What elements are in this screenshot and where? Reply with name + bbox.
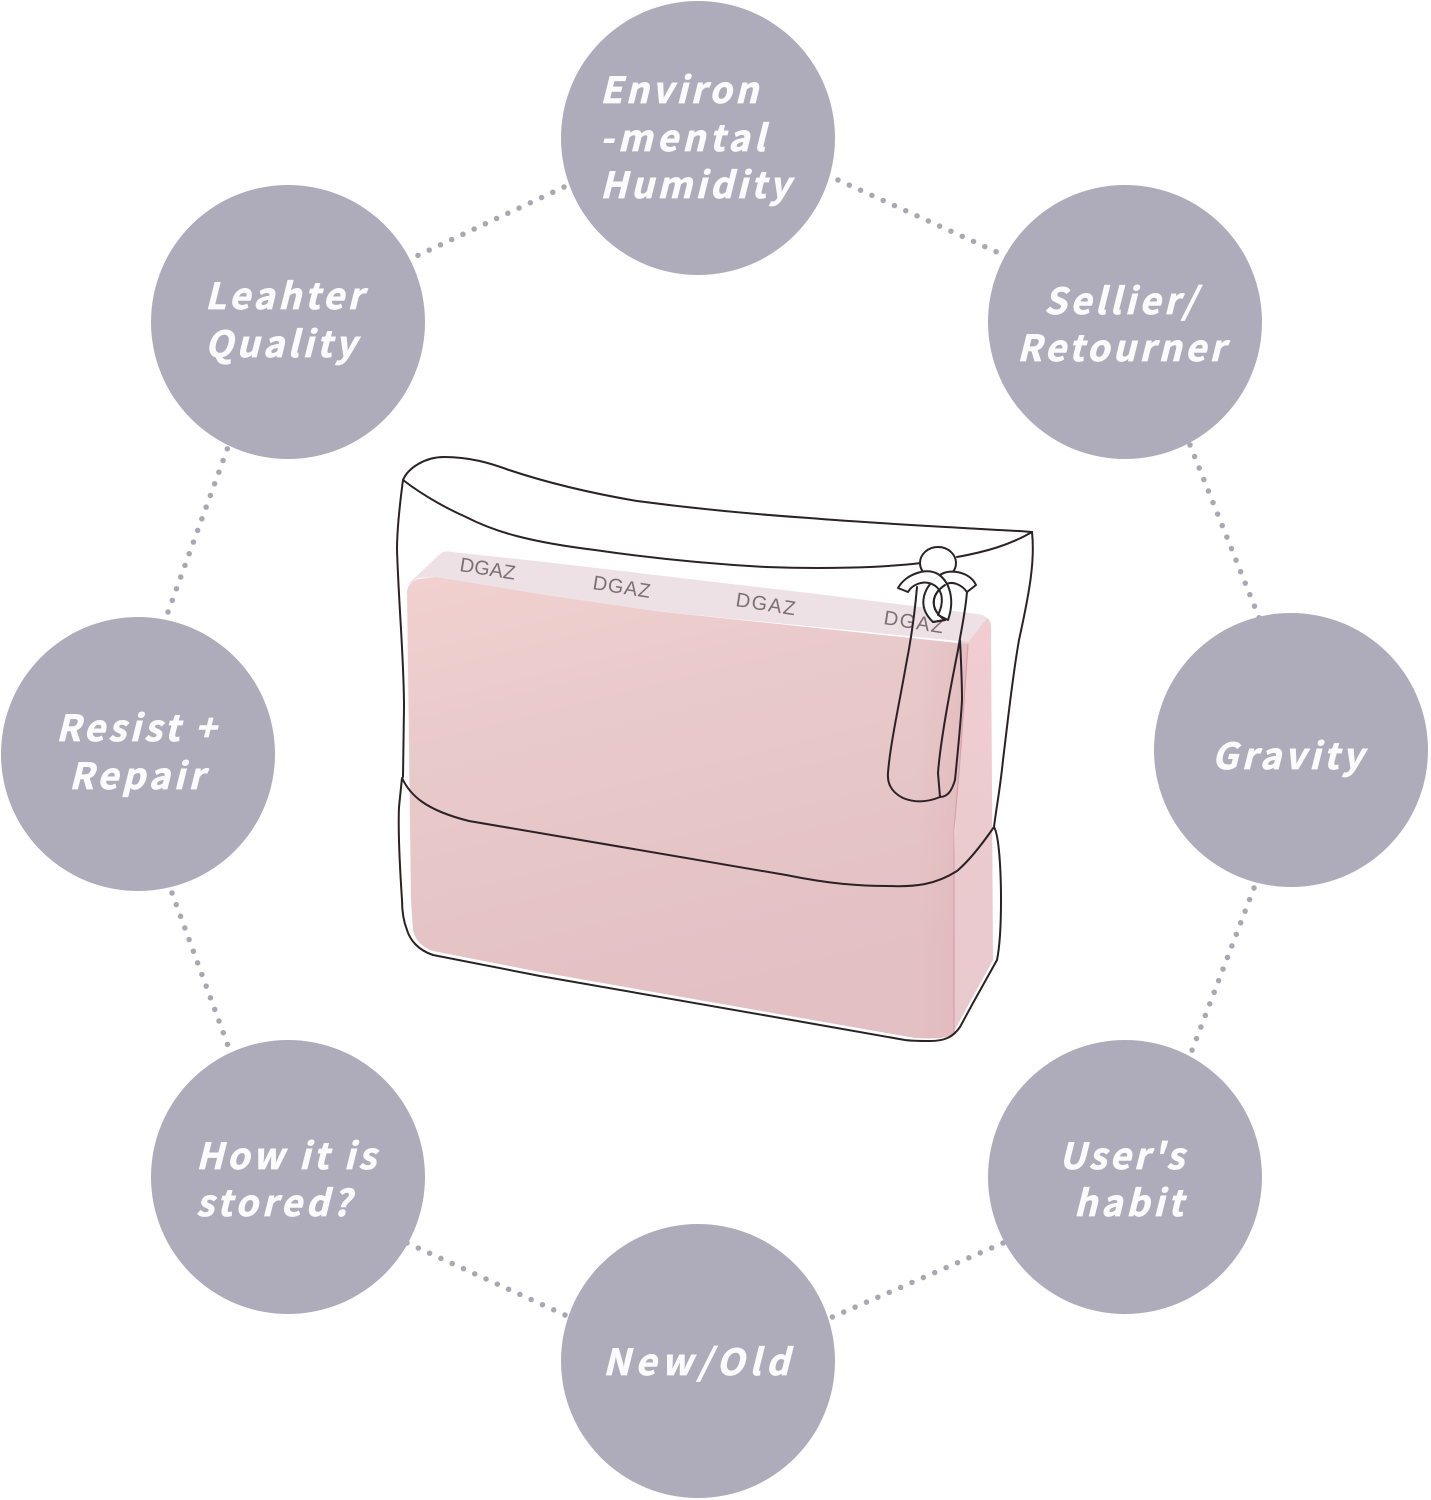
DGAZ labels: DGAZ (458, 554, 517, 585)
DGAZ labels: DGAZ (882, 607, 945, 638)
circle: Leather Quality: Quality (205, 316, 361, 368)
circle: How it is stored: stored? (196, 1175, 356, 1227)
clasp left C (898, 571, 951, 620)
strap (888, 587, 940, 801)
clasp ball (920, 547, 956, 579)
circle: Environmental Humidity (561, 1, 835, 275)
DGAZ labels: DGAZ (734, 589, 797, 620)
pillow right side face (950, 618, 993, 1034)
circle: Environmental Humidity: Environ (600, 62, 760, 114)
pillow front shading (800, 630, 968, 1038)
circle: New/Old: New/Old (603, 1334, 794, 1386)
product: pink storage pillow in bag outline (397, 457, 1033, 1041)
circle: How it is stored (151, 1040, 425, 1314)
dotted connectors (168, 180, 1260, 1318)
circle: Leather Quality: Leahter (205, 268, 368, 320)
clasp right C (923, 572, 976, 622)
DGAZ labels (458, 554, 945, 638)
circle: User's habit: User's (1059, 1128, 1187, 1180)
pillow seam (954, 644, 968, 1032)
pillow top band (407, 551, 987, 642)
circle: Resist + Repair (1, 617, 275, 891)
circle: User's habit (988, 1040, 1262, 1314)
circle: Sellier / Retourner (988, 185, 1262, 459)
circle: Sellier / Retourner: Sellier/ (1044, 273, 1203, 325)
circle: Environmental Humidity: Humidity (600, 157, 795, 209)
circle: Gravity (1154, 613, 1428, 887)
circle: Leather Quality (151, 185, 425, 459)
circle: User's habit: habit (1074, 1175, 1187, 1227)
circle: Resist + Repair: Resist + (56, 700, 219, 752)
strap and clasp (888, 547, 976, 801)
circle: Environmental Humidity: -mental (600, 110, 770, 162)
circle: How it is stored: How it is (196, 1128, 379, 1180)
DGAZ labels: DGAZ (591, 572, 652, 603)
pillow front face (407, 577, 968, 1038)
circle: New/Old (561, 1224, 835, 1498)
circle: Sellier / Retourner: Retourner (1017, 320, 1230, 372)
circle: Resist + Repair: Repair (69, 748, 209, 800)
circle: Gravity: Gravity (1212, 728, 1368, 780)
bag outline (397, 457, 1033, 1041)
